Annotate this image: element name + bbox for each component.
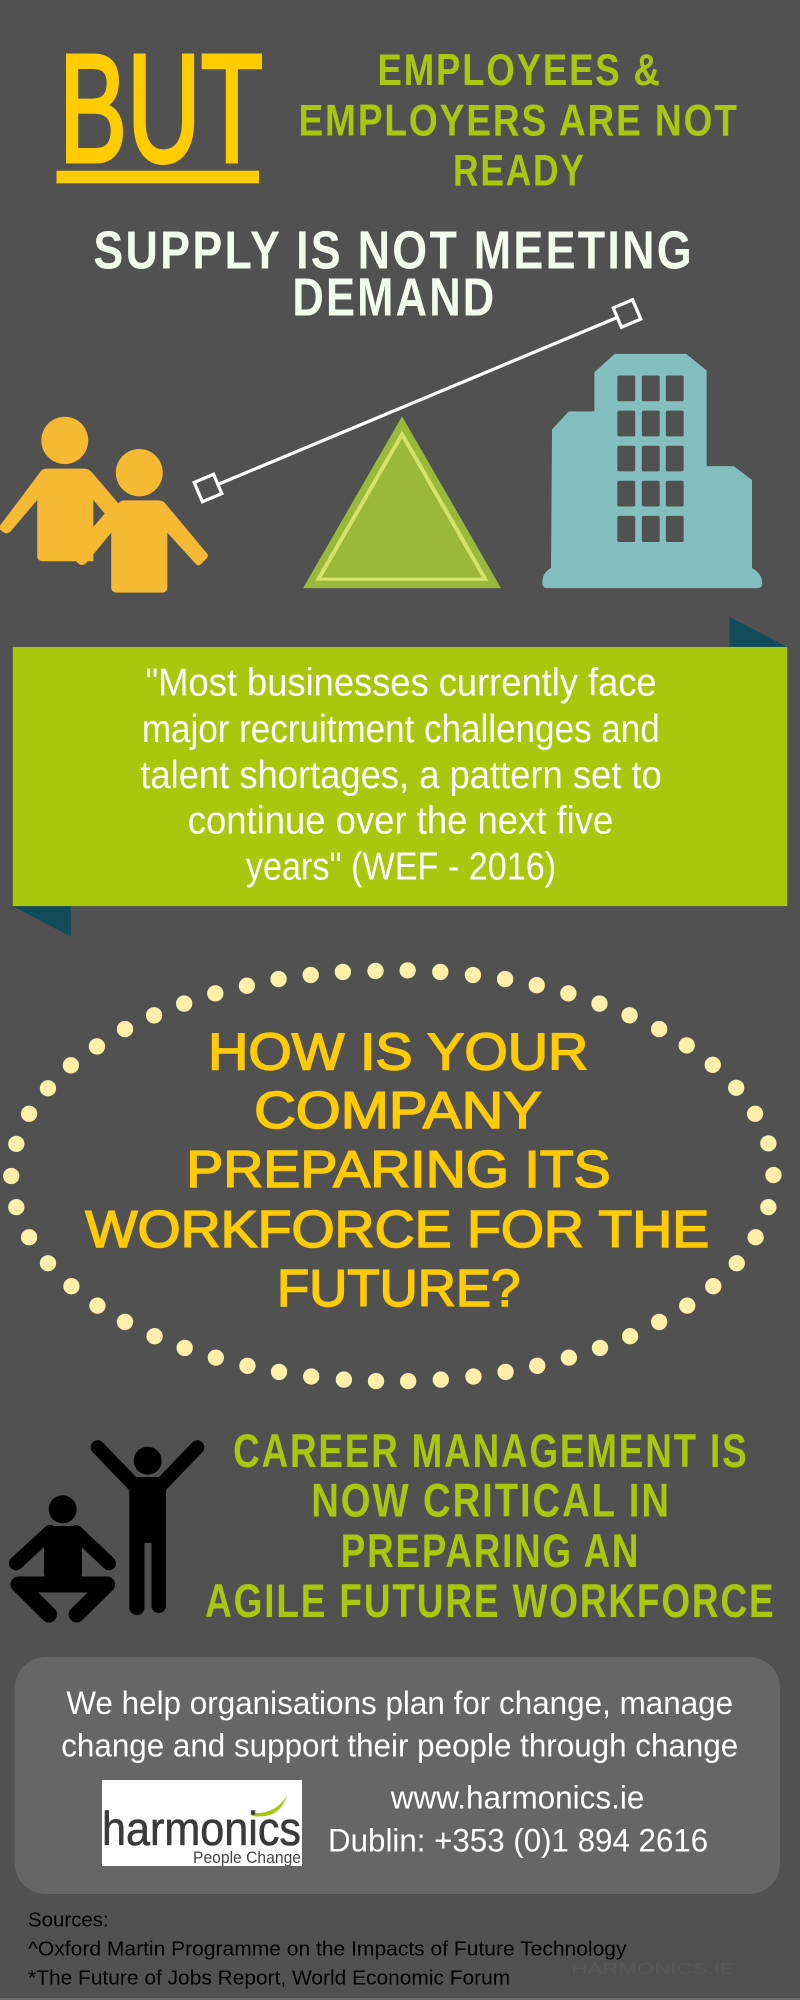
logo: harmonics: People Change <box>193 1848 301 1867</box>
quote text <box>140 661 662 889</box>
heading: supply is not meeting demand <box>93 220 694 327</box>
text: sources: *The Future of Jobs Report, World Economic Forum <box>28 1967 510 1989</box>
text: sources: ^Oxford Martin Programme on the Impacts of Future Technology <box>28 1938 627 1960</box>
question text <box>85 1022 709 1317</box>
banner: quote ribbon <box>13 617 787 937</box>
section: bottom <box>15 1424 780 1989</box>
question text: FUTURE? <box>277 1259 520 1317</box>
icon: people <box>0 417 208 593</box>
quote text: continue over the next five <box>188 800 613 843</box>
quote text: years" (WEF - 2016) <box>246 846 556 889</box>
question text: PREPARING ITS <box>186 1140 611 1198</box>
logo: harmonics <box>102 1780 302 1867</box>
text: sources <box>28 1909 627 1989</box>
logo: harmonics: harmonics <box>102 1802 301 1855</box>
question text: HOW IS YOUR <box>208 1022 588 1080</box>
icon: standing figure arms raised <box>98 1447 197 1615</box>
text: website and phone: www.harmonics.ie <box>390 1781 644 1816</box>
dotted ellipse <box>3 962 782 1389</box>
heading: employees and employers: READY <box>453 145 586 195</box>
section: top <box>0 44 762 593</box>
heading: supply is not meeting demand: DEMAND <box>292 267 496 327</box>
heading: employees and employers: EMPLOYEES & <box>378 44 662 95</box>
quote text: major recruitment challenges and <box>142 708 660 751</box>
icon: seesaw beam <box>194 300 641 502</box>
watermark: HARMONICS.IE <box>571 1960 735 1978</box>
quote text: talent shortages, a pattern set to <box>140 754 662 797</box>
title: BUT: BUT <box>59 22 263 194</box>
text: sources: Sources: <box>28 1909 109 1931</box>
text: website and phone <box>328 1781 708 1859</box>
heading: employees and employers <box>298 44 739 195</box>
quote text: "Most businesses currently face <box>145 661 657 704</box>
question text: COMPANY <box>254 1081 542 1139</box>
icon: crouching figure <box>16 1495 109 1614</box>
icon: seesaw pivot triangle <box>303 416 501 588</box>
heading: career management <box>205 1424 776 1627</box>
icon: office building <box>542 354 762 588</box>
text: we help organisations <box>61 1686 738 1764</box>
panel: contact <box>15 1657 780 1894</box>
section: middle <box>3 617 787 1389</box>
question text: WORKFORCE FOR THE <box>85 1200 709 1258</box>
title: BUT <box>56 22 263 194</box>
